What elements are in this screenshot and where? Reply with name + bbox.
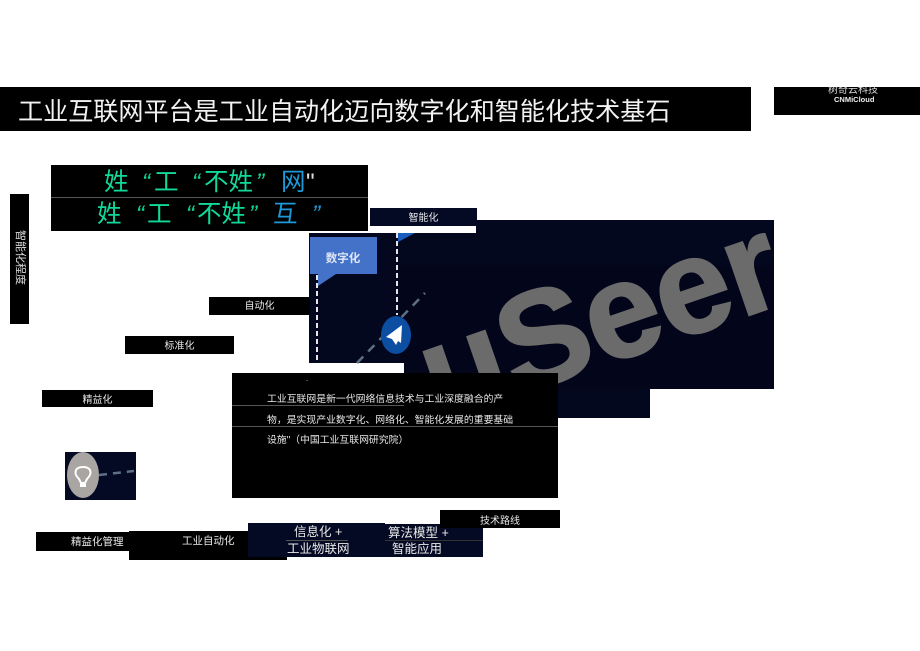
stage: informatization: 工业物联网 [287, 542, 350, 556]
slogan box: 姓 [104, 169, 128, 196]
level label: automation [209, 297, 310, 315]
level label: intelligence: 智能化 [408, 213, 438, 224]
definition text box: 工业互联网是新一代网络信息技术与工业深度融合的产 [267, 394, 503, 405]
y axis label [10, 194, 29, 324]
roadmap label [440, 510, 560, 528]
definition text box: 物，是实现产业数字化、网络化、智能化发展的重要基础 [267, 415, 513, 426]
slogan box: “ [192, 169, 200, 196]
technology roadmap [36, 510, 560, 560]
slogan box: 不姓 [197, 201, 246, 228]
slogan box: ” [312, 201, 320, 228]
y axis label: 智能化程度 [14, 230, 26, 285]
company logo block [774, 87, 920, 115]
dashed marker lines [317, 233, 397, 363]
level label: standardization [125, 336, 234, 354]
stage: informatization: 信息化 + [294, 525, 342, 539]
title banner [0, 87, 751, 131]
definition text box: . [306, 374, 308, 383]
icon: paper plane [381, 316, 411, 354]
slogan box: 姓 [97, 201, 122, 228]
definition text box: 设施"（中国工业互联网研究院） [267, 435, 408, 446]
callout: digitalization [310, 237, 377, 286]
slogan box: ” [256, 169, 264, 196]
slogan box: “ [142, 169, 150, 196]
slogan box: “ [136, 201, 144, 228]
definition text box [232, 373, 558, 498]
level label: automation: 自动化 [244, 301, 274, 312]
slogan box: ” [249, 201, 257, 228]
slogan box: " [306, 169, 315, 196]
icon: light bulb [65, 452, 136, 500]
stage: algorithm models: 算法模型 + [388, 526, 449, 540]
title banner: 工业互联网平台是工业自动化迈向数字化和智能化技术基石 [18, 98, 670, 126]
slogan box: 工 [147, 201, 172, 228]
slogan box [51, 165, 368, 231]
stage: lean management: 精益化管理 [71, 536, 124, 548]
stage: informatization [248, 523, 385, 557]
stage: algorithm models: 智能应用 [392, 542, 442, 556]
background image panel [309, 220, 774, 418]
roadmap label: 技术路线 [480, 516, 520, 527]
company logo block: CNMiCloud [834, 95, 874, 104]
level label: standardization: 标准化 [164, 341, 194, 352]
slogan box: “ [186, 201, 194, 228]
slogan box: 工 [154, 169, 178, 196]
callout: intelligence tail [398, 233, 415, 242]
level label: intelligence [370, 208, 477, 226]
stage: lean management [36, 532, 129, 551]
level label: lean: 精益化 [82, 395, 112, 406]
slogan box: 互 [273, 201, 298, 228]
stage: industrial automation [129, 531, 287, 560]
level label: lean [42, 390, 153, 407]
stage: industrial automation: 工业自动化 [182, 535, 234, 547]
stage: algorithm models [385, 524, 483, 557]
dashed growth line [357, 293, 425, 363]
slogan box: 网 [281, 169, 306, 196]
slogan box: 不姓 [204, 169, 253, 196]
callout: digitalization: 数字化 [326, 251, 361, 265]
